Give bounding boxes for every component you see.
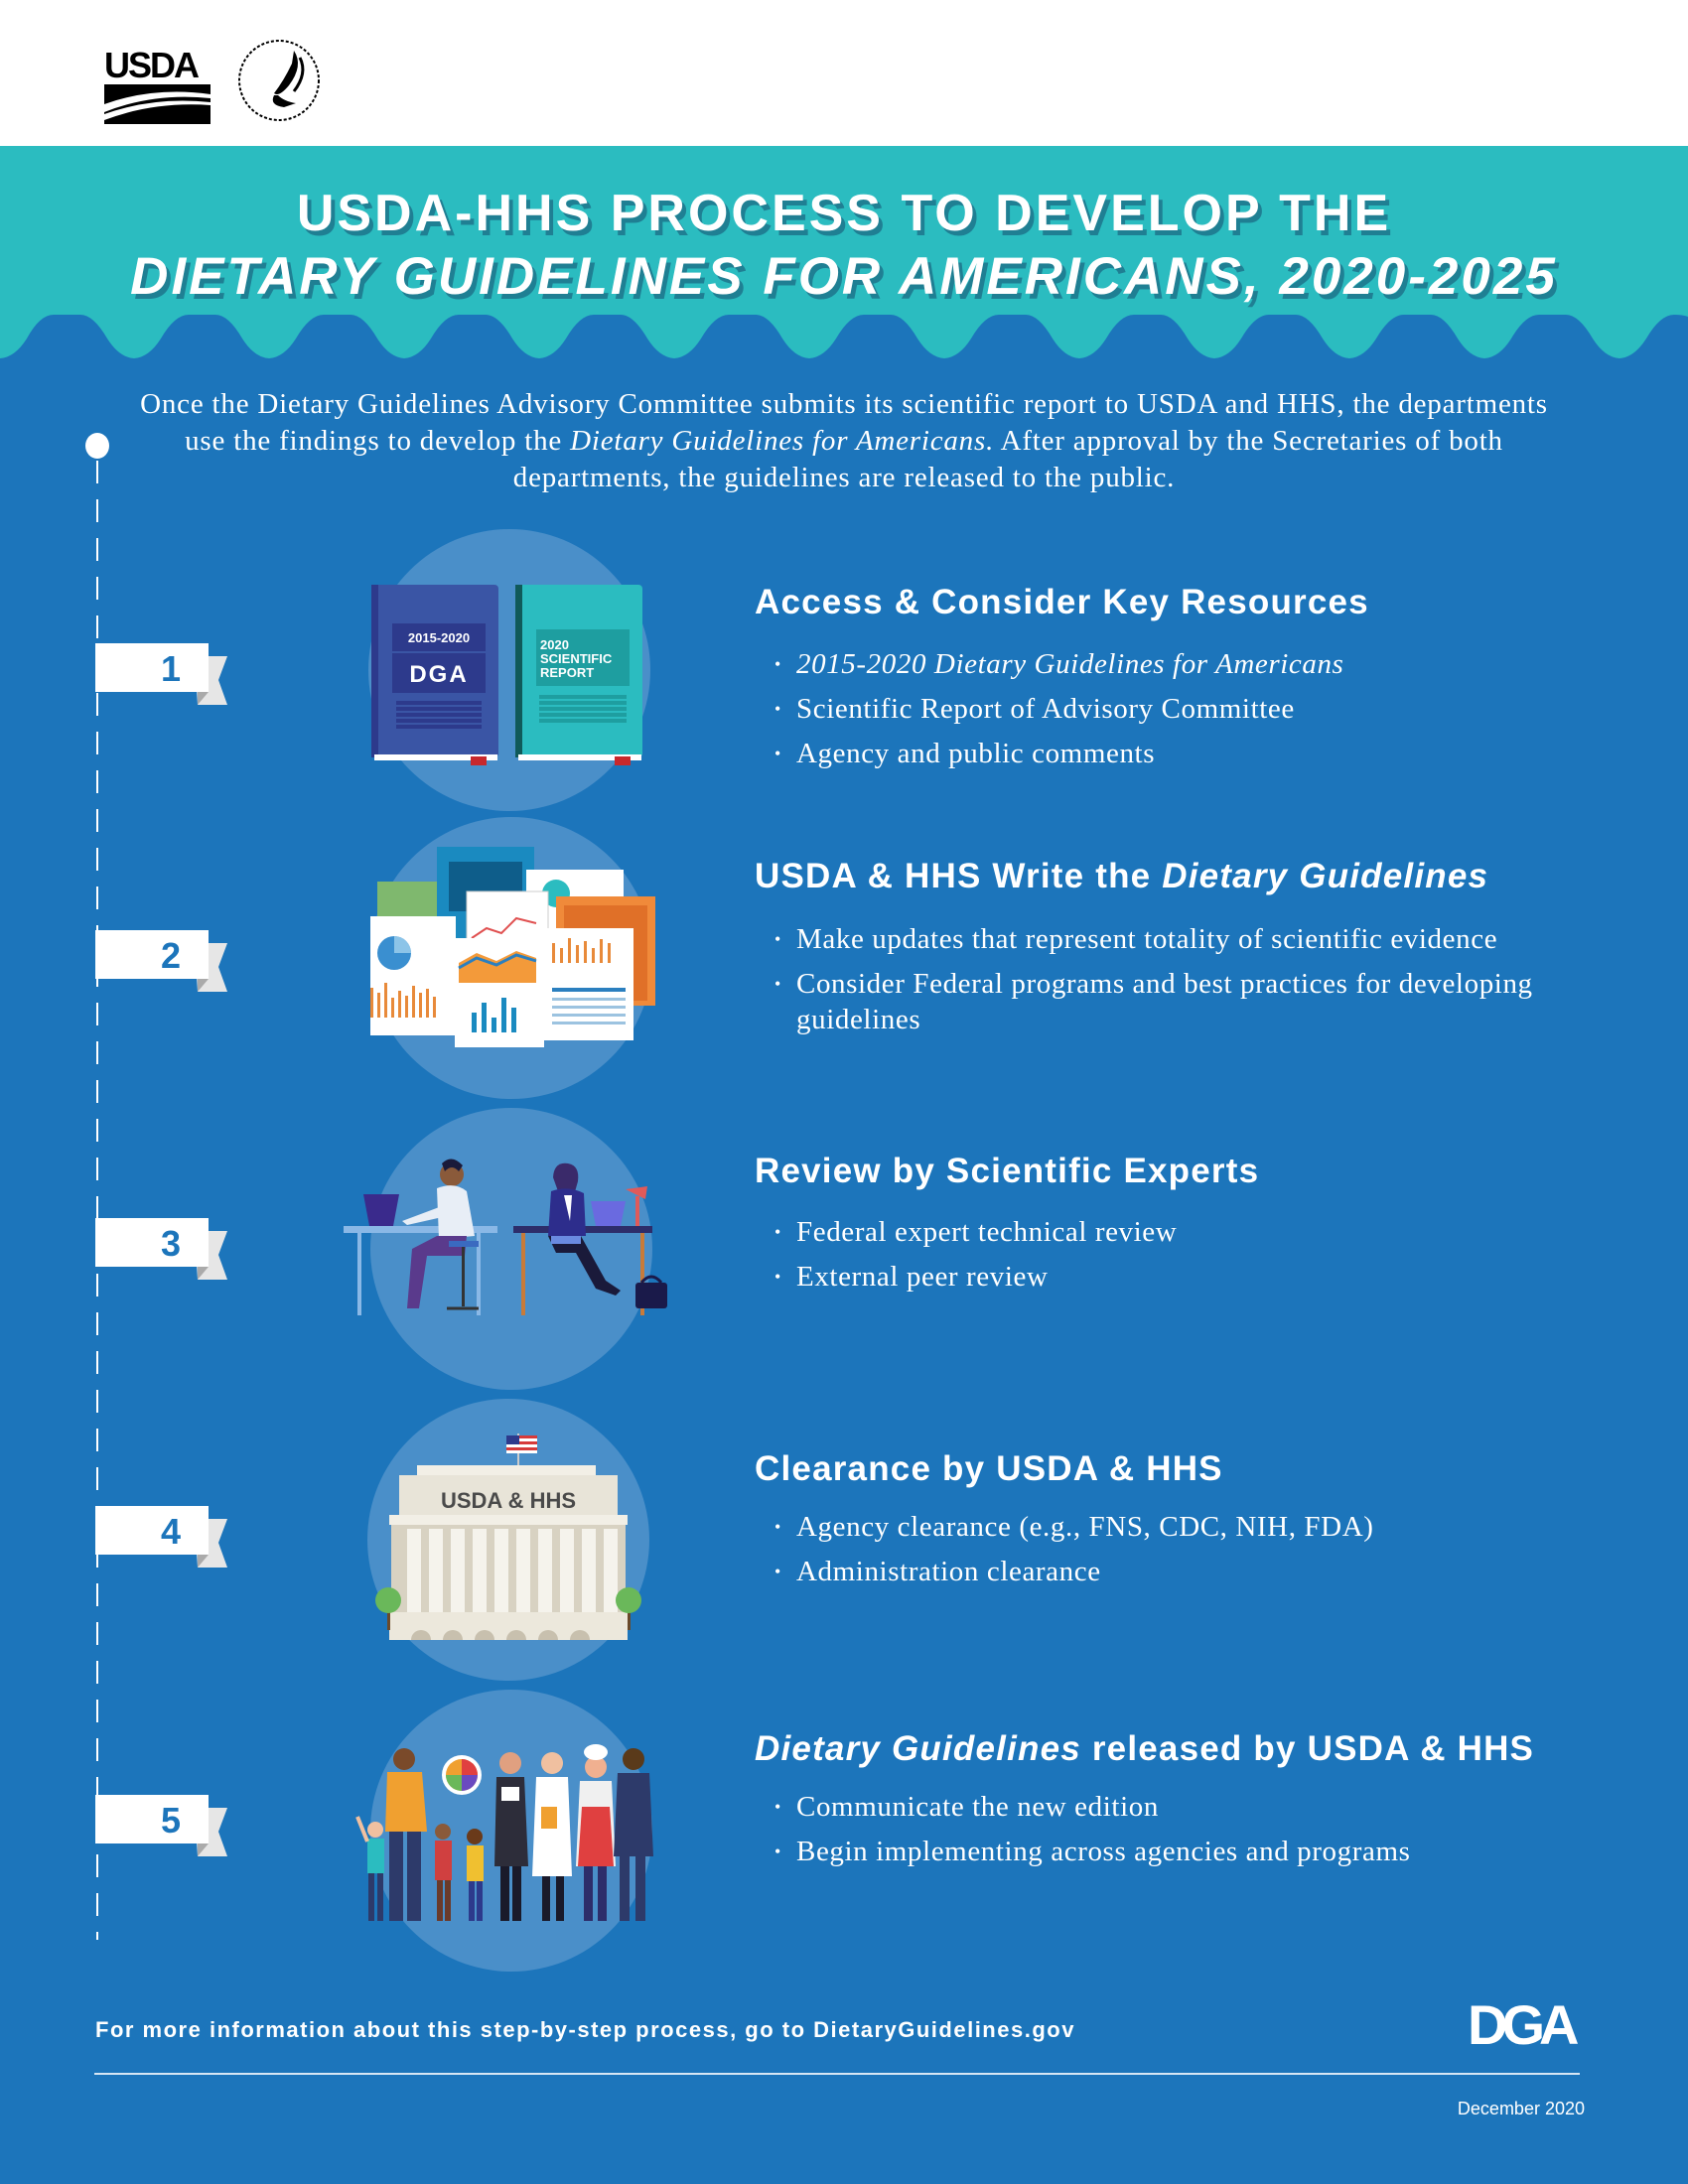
step 2 bullets: guidelines (796, 1004, 920, 1035)
step 1 bullets: Scientific Report of Advisory Committee (796, 693, 1295, 725)
step 5 ribbon: 5 (161, 1800, 181, 1841)
step 4 bullets (775, 1511, 1374, 1587)
step 5 illustration: group of people (355, 1690, 653, 1972)
step 3 illustration: experts at desks (344, 1108, 667, 1390)
step 2 illustration: charts and reports (370, 817, 655, 1099)
intro text (140, 388, 1548, 493)
step 4 bullets: Agency clearance (e.g., FNS, CDC, NIH, FDA) (796, 1511, 1374, 1543)
header white band (0, 0, 1688, 146)
step 2 bullets: Make updates that represent totality of scientific evidence (796, 923, 1497, 955)
logo: DGA: DGA (1468, 1993, 1573, 2056)
step 1 illustration: books: SCIENTIFIC (540, 651, 613, 666)
step 4 illustration: government building (367, 1399, 649, 1681)
step 1 illustration: books: 2015-2020 (408, 630, 470, 645)
logo: USDA (104, 45, 211, 124)
intro text: departments, the guidelines are released to the public. (513, 462, 1175, 493)
step 5 heading: Dietary Guidelines released by USDA & HHS (755, 1729, 1534, 1768)
step 1 illustration: books (368, 529, 650, 811)
step 2 bullets: Consider Federal programs and best practices for developing (796, 968, 1533, 1000)
step 1 heading: Access & Consider Key Resources (755, 583, 1369, 621)
step 1 ribbon (95, 643, 227, 705)
step 4 bullets: Administration clearance (796, 1556, 1101, 1587)
step 1 illustration: books: DGA (409, 661, 469, 688)
step 3 bullets: External peer review (796, 1261, 1049, 1293)
intro text: use the findings to develop the Dietary Guidelines for Americans. After approval by the Secretaries of both (185, 425, 1503, 457)
title: DIETARY GUIDELINES FOR AMERICANS, 2020-2025 (130, 247, 1558, 306)
step 1 illustration: books: REPORT (540, 665, 594, 680)
step 4 heading: Clearance by USDA & HHS (755, 1449, 1223, 1488)
step 5 bullets (775, 1791, 1411, 1867)
step 2 ribbon (95, 930, 227, 992)
step 5 bullets: Communicate the new edition (796, 1791, 1159, 1823)
title (130, 185, 1559, 308)
teal title band with waves (0, 146, 1688, 358)
step 4 illustration: government building: USDA & HHS (441, 1488, 576, 1513)
step 2 heading: USDA & HHS Write the Dietary Guidelines (755, 857, 1488, 895)
step 3 bullets: Federal expert technical review (796, 1216, 1177, 1248)
logo: USDA: USDA (104, 45, 198, 85)
step 4 ribbon: 4 (161, 1511, 181, 1552)
timeline: dashed line with start dot (85, 433, 109, 1940)
step 1 ribbon: 1 (161, 648, 181, 689)
intro text: Once the Dietary Guidelines Advisory Committee submits its scientific report to USDA and HHS, the departments (140, 388, 1548, 420)
step 4 ribbon (95, 1506, 227, 1568)
step 3 ribbon (95, 1218, 227, 1280)
step 3 heading: Review by Scientific Experts (755, 1152, 1259, 1190)
step 2 bullets (775, 923, 1533, 1035)
step 2 ribbon: 2 (161, 935, 181, 976)
step 1 bullets (775, 648, 1343, 769)
step 5 ribbon (95, 1795, 227, 1856)
step 1 illustration: books: 2020 (540, 637, 569, 652)
footer: more info: For more information about this step-by-step process, go to DietaryGuidelines.gov (95, 2017, 1075, 2042)
step 1 bullets: Agency and public comments (796, 738, 1155, 769)
footer date: December 2020 (1458, 2099, 1585, 2118)
title: USDA-HHS PROCESS TO DEVELOP THE (297, 185, 1391, 242)
step 3 ribbon: 3 (161, 1223, 181, 1264)
step 1 bullets: 2015-2020 Dietary Guidelines for Americans (796, 648, 1343, 680)
step 5 bullets: Begin implementing across agencies and programs (796, 1836, 1411, 1867)
step 3 bullets (775, 1216, 1177, 1293)
logo: HHS (238, 40, 320, 121)
